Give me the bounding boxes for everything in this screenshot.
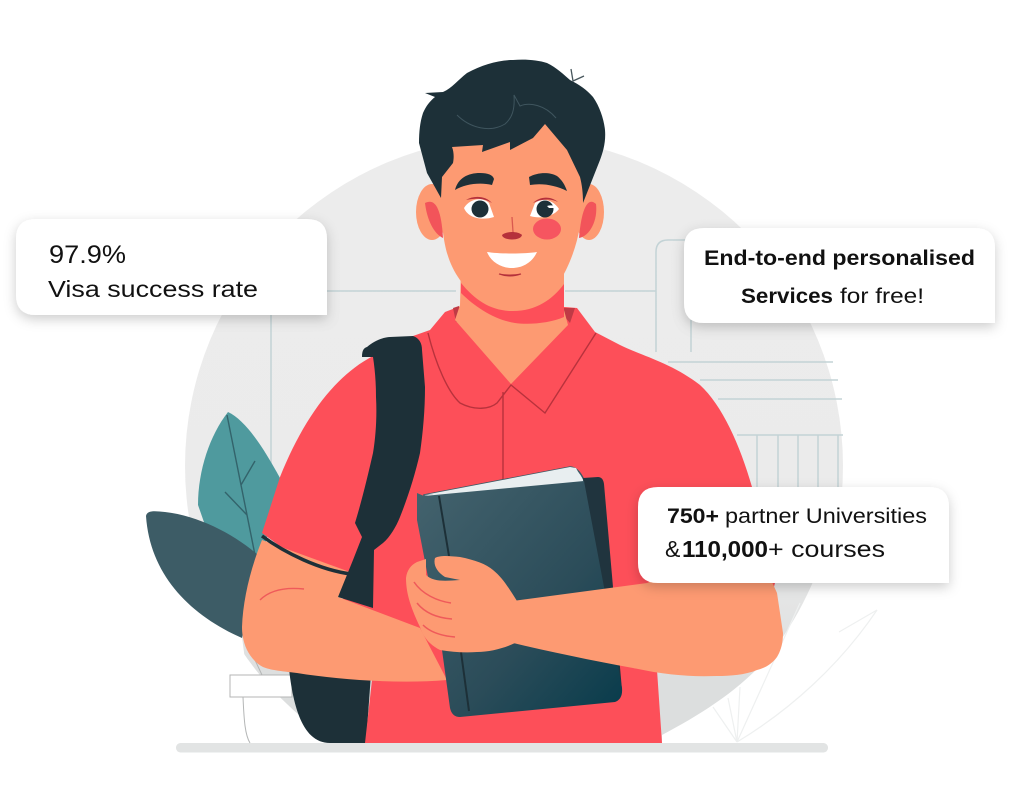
book [417, 467, 622, 717]
collar shade left [453, 306, 462, 322]
backpack lower body [288, 660, 372, 743]
sleeve band [262, 536, 351, 574]
card background [16, 219, 327, 315]
caption: Visa success rate [48, 276, 258, 302]
book spine lower [461, 652, 469, 711]
card background [638, 487, 949, 583]
plant [146, 412, 292, 743]
book spine upper [439, 496, 449, 556]
cheek [533, 218, 561, 240]
neck shadow band [461, 283, 564, 324]
teal leaf [198, 412, 280, 560]
collar lines [428, 333, 596, 482]
hair detail [457, 95, 556, 129]
elbow crease [260, 588, 304, 600]
backpack strap [338, 336, 425, 608]
left eye [464, 199, 494, 219]
book cover [417, 481, 622, 717]
dark leaf [146, 511, 258, 638]
faint plant lines lower right [713, 603, 877, 742]
nose [502, 232, 522, 240]
book white edge [424, 467, 582, 495]
right inner ear [579, 202, 596, 238]
card: visa success [16, 219, 327, 315]
hair [419, 60, 605, 203]
heading line: End-to-end personalised [704, 247, 975, 270]
neck and chest skin [455, 265, 568, 384]
left arm [242, 540, 447, 682]
statistic: 97.9% [49, 241, 126, 269]
book pages [424, 467, 584, 500]
left eyebrow [455, 173, 494, 190]
white plant area lower right [662, 570, 885, 745]
ampersand: & [665, 536, 680, 562]
hair tuft [571, 69, 584, 81]
plant pot [230, 660, 292, 743]
card background [684, 228, 995, 323]
card: personalised services [684, 228, 995, 323]
courses label: + courses [768, 536, 885, 562]
partner label: partner Universities [725, 505, 927, 528]
background building lines [271, 240, 843, 505]
nose line [512, 217, 513, 232]
floor [176, 743, 828, 752]
lower lip [499, 274, 521, 276]
left inner ear [425, 202, 443, 238]
right eyebrow [529, 173, 567, 191]
right pupil [536, 200, 554, 218]
left eyelid [466, 197, 492, 203]
right arm [505, 540, 783, 676]
smile [487, 252, 537, 268]
book back cover [583, 477, 622, 690]
number 750+: 750+ [667, 505, 719, 528]
face [441, 115, 583, 309]
right eyelid [533, 198, 558, 203]
collar shade right [564, 308, 575, 323]
right ear [574, 184, 604, 240]
person [242, 60, 783, 743]
regular words: for free! [840, 285, 924, 308]
hand [406, 556, 517, 652]
white plant area lower left [146, 512, 290, 743]
left ear [416, 184, 448, 240]
finger lines [414, 582, 455, 637]
teal leaf veins [225, 415, 255, 555]
shirt [262, 307, 775, 743]
eye glint [547, 205, 557, 208]
left pupil [472, 200, 488, 218]
bold word: Services [741, 285, 833, 308]
right eye [530, 200, 559, 217]
card: partner universities [638, 487, 949, 583]
number 110,000: 110,000 [682, 536, 768, 562]
background circle [185, 150, 843, 741]
